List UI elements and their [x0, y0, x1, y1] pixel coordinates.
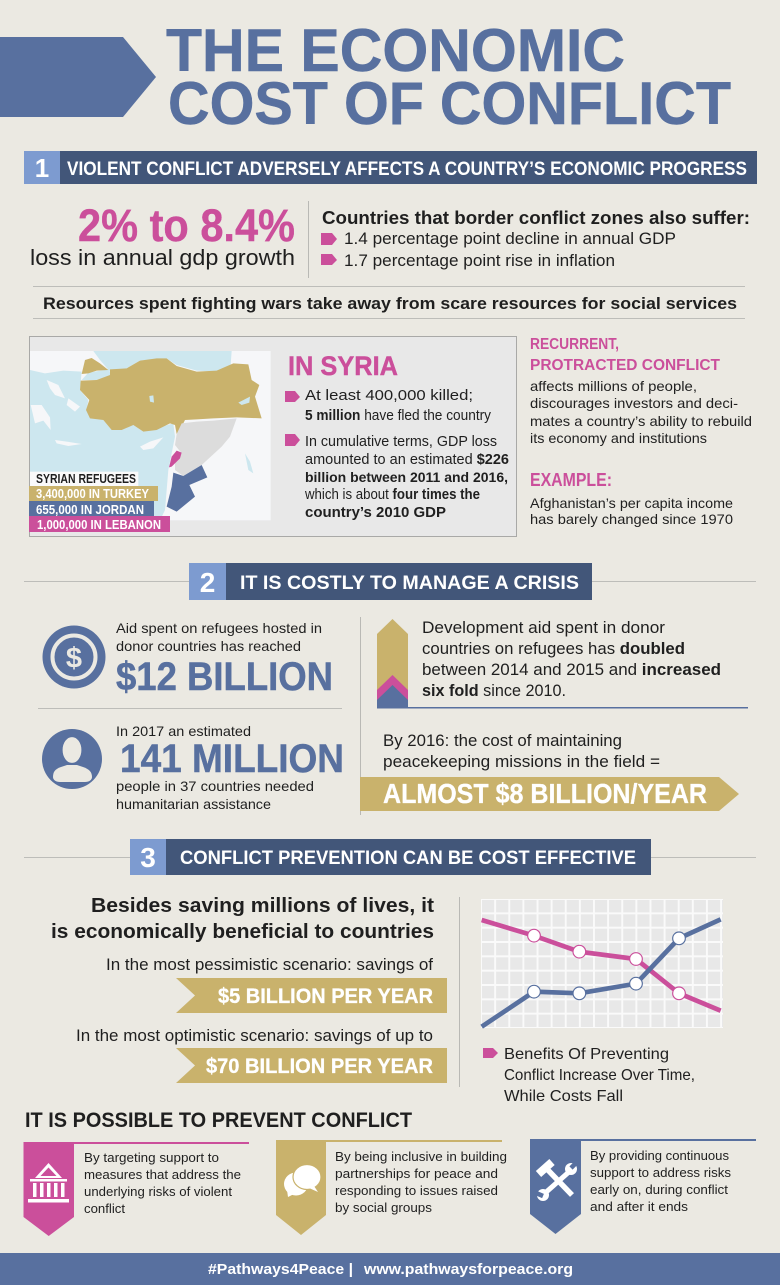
development aid text block: Development aid spent in donor [422, 618, 665, 637]
section 2 heading: 2 [200, 567, 215, 598]
title [166, 17, 731, 137]
footer [0, 1253, 780, 1285]
humanitarian assistance statistic [116, 723, 344, 812]
development aid text block: between 2014 and 2015 and increased [422, 660, 721, 679]
refugee aid statistic: Aid spent on refugees hosted in [116, 620, 322, 636]
example text block [530, 470, 733, 527]
text: continuous support: support to address risks [590, 1165, 731, 1180]
text: continuous support: By providing continuous [590, 1148, 730, 1163]
bordering countries text block: 1.4 percentage point decline in annual GDP [344, 230, 676, 248]
humanitarian assistance statistic: people in 37 countries needed [116, 778, 314, 794]
refugee aid statistic [116, 620, 333, 699]
recurrent conflict text block: affects millions of people, [530, 378, 697, 394]
footer: www.pathwaysforpeace.org [363, 1262, 573, 1278]
humanitarian assistance statistic: In 2017 an estimated [116, 723, 251, 739]
chart caption [483, 1046, 695, 1105]
savings heading: Besides saving millions of lives, it [91, 895, 434, 917]
map legend: syrian refugees: SYRIAN REFUGEES [36, 472, 136, 486]
gdp growth statistic: 2% to 8.4% [78, 200, 295, 251]
peacekeeping cost text [383, 731, 660, 771]
icon: person [42, 729, 102, 789]
section 1 heading [24, 151, 757, 184]
footer: #Pathways4Peace | [208, 1262, 353, 1278]
text: continuous support: early on, during conflict [590, 1182, 728, 1197]
section 3 heading: CONFLICT PREVENTION CAN BE COST EFFECTIVE [180, 848, 636, 869]
recurrent conflict text block: its economy and institutions [530, 430, 707, 446]
map legend: syrian refugees: 655,000 IN JORDAN [36, 503, 144, 517]
optimistic scenario [76, 1027, 447, 1083]
heading: in syria: IN SYRIA [288, 351, 398, 381]
section 1 heading: 1 [35, 153, 49, 183]
peacekeeping cost text: By 2016: the cost of maintaining [383, 731, 622, 750]
syria facts: 5 million have fled the country [305, 408, 492, 424]
section 3 heading: 3 [140, 842, 156, 873]
map of turkey and syria region [30, 351, 271, 520]
title: COST OF CONFLICT [168, 70, 731, 137]
syria facts [285, 387, 509, 521]
icon: speech bubbles [284, 1164, 321, 1197]
bordering countries text block [321, 208, 750, 270]
peacekeeping cost arrow banner: ALMOST $8 BILLION/YEAR [383, 778, 707, 809]
text: inclusive partnerships: partnerships for peace and [335, 1166, 498, 1181]
humanitarian assistance statistic: humanitarian assistance [116, 796, 271, 812]
pessimistic scenario: $5 BILLION PER YEAR [218, 985, 433, 1008]
syria facts: amounted to an estimated $226 [305, 452, 509, 468]
recurrent conflict text block: discourages investors and deci- [530, 395, 738, 411]
syria facts: country’s 2010 GDP [305, 505, 446, 521]
map legend: syrian refugees [29, 472, 170, 532]
optimistic scenario: $70 BILLION PER YEAR [206, 1055, 433, 1078]
panel: inclusive partnerships [276, 1140, 507, 1235]
icon: institution building [28, 1163, 69, 1202]
refugee aid statistic: donor countries has reached [116, 638, 301, 654]
icon: stacked rising arrow [377, 619, 408, 707]
panel: continuous support [530, 1139, 756, 1234]
bordering countries text block: Countries that border conflict zones also suffer: [322, 208, 750, 228]
text: targeting support [84, 1150, 241, 1216]
heading: it is possible to prevent conflict: IT IS POSSIBLE TO PREVENT CONFLICT [25, 1109, 412, 1132]
development aid text block [422, 618, 721, 700]
refugee aid statistic: $12 BILLION [116, 655, 333, 699]
syria facts: At least 400,000 killed; [305, 387, 473, 404]
section 2 heading: IT IS COSTLY TO MANAGE A CRISIS [240, 573, 579, 594]
development aid text block: six fold since 2010. [422, 681, 566, 700]
optimistic scenario: In the most optimistic scenario: savings of up to [76, 1027, 433, 1045]
text: continuous support: and after it ends [590, 1199, 689, 1214]
title arrow [0, 37, 156, 117]
map legend: syrian refugees: 1,000,000 IN LEBANON [37, 518, 161, 532]
text: targeting support: underlying risks of violent [84, 1184, 232, 1199]
chart caption: Conflict Increase Over Time, [504, 1067, 695, 1084]
pessimistic scenario [106, 956, 447, 1013]
chart caption: Benefits Of Preventing [504, 1046, 669, 1063]
savings heading: is economically beneficial to countries [51, 921, 434, 943]
icon: dollar coin [42, 626, 106, 688]
gdp growth statistic [30, 200, 295, 270]
bordering countries text block: 1.7 percentage point rise in inflation [344, 252, 615, 270]
text: inclusive partnerships: responding to issues raised [335, 1183, 498, 1198]
savings heading [51, 895, 434, 943]
example text block: Afghanistan’s per capita income [530, 495, 733, 511]
syria facts: which is about four times the [304, 487, 480, 503]
icon: dollar coin: $ [66, 642, 82, 674]
panel: in syria [29, 336, 516, 536]
chart caption: While Costs Fall [504, 1088, 623, 1105]
recurrent conflict text block: RECURRENT, [530, 336, 619, 353]
gdp growth statistic: loss in annual gdp growth [30, 245, 295, 270]
section 2 heading [189, 563, 592, 600]
text: targeting support: By targeting support to [84, 1150, 219, 1165]
section 3 heading [130, 839, 651, 875]
resources statement: Resources spent fighting wars take away from scare resources for social services [43, 295, 737, 313]
map legend: syrian refugees: 3,400,000 IN TURKEY [36, 487, 150, 501]
development aid text block: countries on refugees has doubled [422, 639, 685, 658]
text: targeting support: conflict [84, 1201, 125, 1216]
example text block: has barely changed since 1970 [530, 511, 733, 527]
text: inclusive partnerships: by social groups [335, 1200, 433, 1215]
syria facts: In cumulative terms, GDP loss [305, 434, 497, 450]
humanitarian assistance statistic: 141 MILLION [120, 737, 344, 781]
icon: hammer and wrench [536, 1161, 578, 1201]
text: inclusive partnerships: By being inclusive in building [335, 1149, 507, 1164]
text: inclusive partnerships [335, 1149, 507, 1215]
text: continuous support [590, 1148, 731, 1214]
panel: targeting support [24, 1142, 249, 1236]
example text block: EXAMPLE: [530, 470, 612, 490]
title: THE ECONOMIC [166, 17, 625, 84]
peacekeeping cost text: peacekeeping missions in the field = [383, 752, 660, 771]
pessimistic scenario: In the most pessimistic scenario: savings of [106, 956, 433, 974]
syria facts: billion between 2011 and 2016, [305, 469, 508, 485]
recurrent conflict text block: PROTRACTED CONFLICT [530, 357, 720, 374]
text: targeting support: measures that address the [84, 1167, 241, 1182]
recurrent conflict text block: mates a country’s ability to rebuild [530, 413, 752, 429]
recurrent conflict text block [530, 336, 752, 446]
line chart: benefits and costs [481, 899, 723, 1028]
